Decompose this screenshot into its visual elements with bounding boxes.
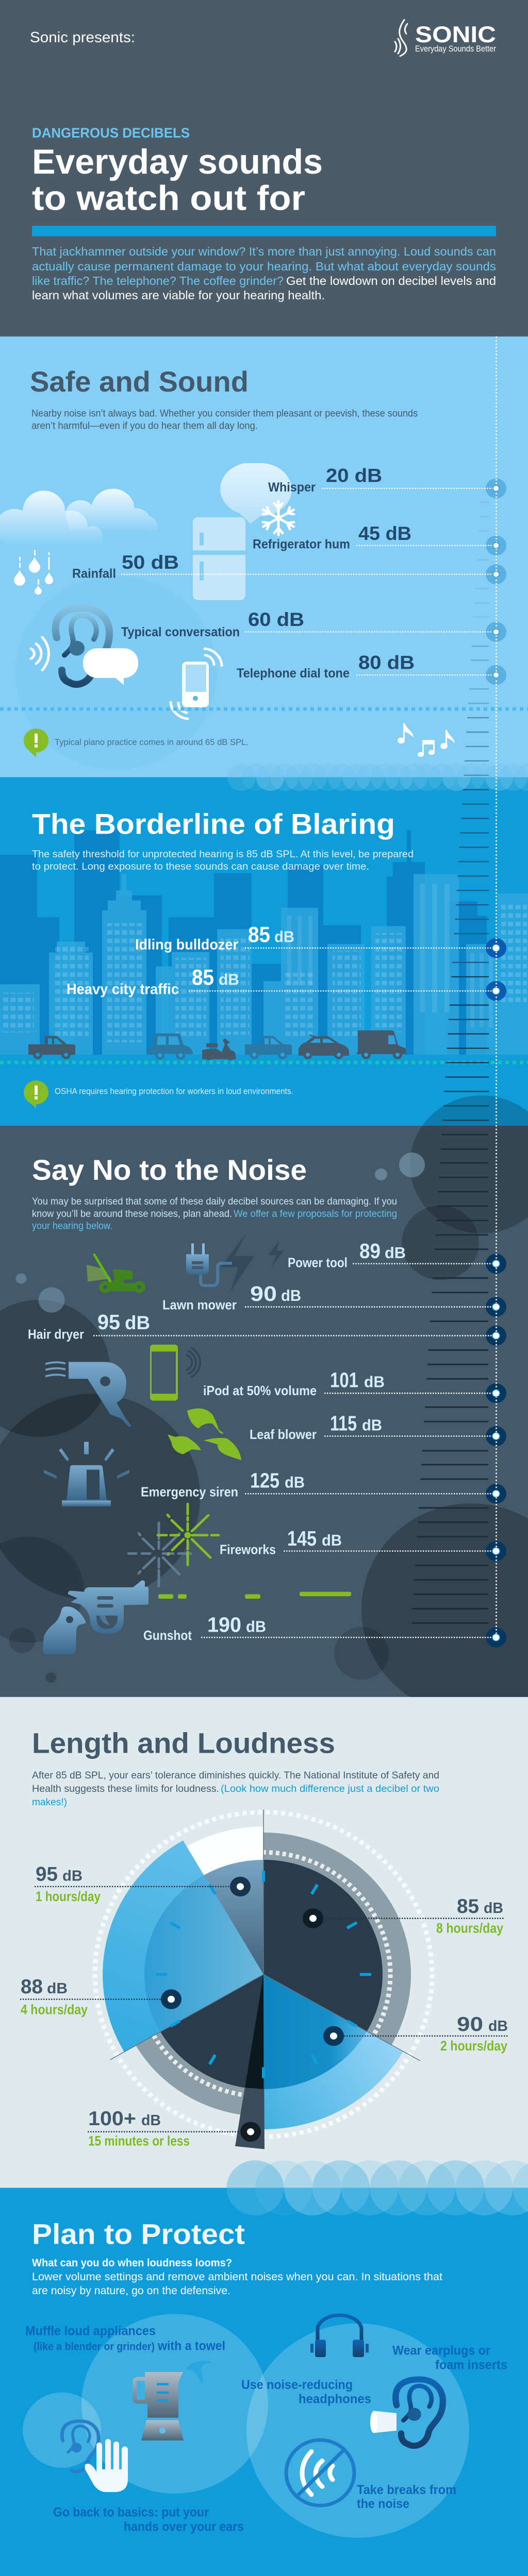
tip: earplugs: Wear earplugs or bbox=[392, 2344, 490, 2358]
text block: aren’t harmful—even if you do hear them all day long. bbox=[31, 420, 258, 431]
label: 95 dB: 95 bbox=[36, 1863, 58, 1885]
panel: say no to the noise bbox=[0, 1095, 528, 1715]
bulldozer label: dB bbox=[274, 928, 294, 945]
text block: know you’ll be around these noises, plan ahead. bbox=[32, 1209, 232, 1219]
label: 100+ dB: dB bbox=[141, 2112, 161, 2129]
icon: clouds bbox=[0, 489, 158, 544]
power tool label bbox=[288, 1240, 406, 1270]
icon: refrigerator bbox=[193, 517, 245, 600]
text block bbox=[32, 1196, 397, 1231]
rainfall label: Rainfall bbox=[72, 567, 116, 581]
lawn mower label: dB bbox=[281, 1287, 301, 1304]
text block: You may be surprised that some of these daily decibel sources can be damaging. If you bbox=[32, 1196, 397, 1207]
rainfall label: 50 dB bbox=[122, 552, 179, 573]
power tool label: dB bbox=[385, 1244, 406, 1262]
iPod label: iPod at 50% volume bbox=[203, 1383, 317, 1398]
bullets bbox=[158, 1592, 351, 1599]
tip: hands over ears: Go back to basics: put your bbox=[53, 2505, 209, 2519]
text: Sonic presents: Sonic presents: bbox=[30, 29, 135, 46]
siren window bbox=[87, 1470, 100, 1499]
tip: muffle appliances: Muffle loud appliances bbox=[25, 2324, 156, 2338]
tip: take breaks: Take breaks from bbox=[357, 2483, 456, 2497]
intro paragraph: like traffic? The telephone? The coffee grinder? bbox=[32, 274, 284, 287]
label: 90 dB: 2 hours/day bbox=[440, 2038, 508, 2054]
label: 100+ dB: 15 minutes or less bbox=[88, 2133, 190, 2149]
icon: ear with sound waves and speech bubble bbox=[31, 608, 138, 685]
icon: sedan bbox=[299, 1035, 349, 1059]
intro paragraph: Get the lowdown on decibel levels and bbox=[286, 274, 496, 287]
intro paragraph: That jackhammer outside your window? It’s more than just annoying. Loud sounds can bbox=[32, 245, 496, 258]
telephone label bbox=[237, 652, 415, 681]
icon: rain drops bbox=[14, 550, 53, 595]
background circles bbox=[0, 1153, 528, 1715]
callout: OSHA: OSHA requires hearing protection for workers in loud environments. bbox=[55, 1087, 293, 1096]
text block: (Look how much difference just a decibel or two bbox=[221, 1783, 439, 1794]
decibel ruler: node centres bbox=[492, 485, 500, 1641]
whisper label bbox=[268, 465, 382, 495]
telephone label: 80 dB bbox=[358, 652, 415, 673]
logo: Sonic: Everyday Sounds Better bbox=[415, 44, 496, 54]
whisper label: Whisper bbox=[268, 480, 316, 495]
tip: earplugs: foam inserts bbox=[435, 2358, 507, 2372]
label: 88 dB bbox=[20, 1976, 182, 2017]
leaf blower label: dB bbox=[362, 1416, 382, 1434]
main title bbox=[32, 142, 323, 217]
telephone label: Telephone dial tone bbox=[237, 666, 350, 681]
emergency siren label: Emergency siren bbox=[141, 1484, 238, 1500]
icon: headphones bbox=[310, 2315, 369, 2357]
label: 85 dB: 8 hours/day bbox=[436, 1920, 504, 1936]
tip: hands over ears bbox=[53, 2505, 244, 2534]
fireworks label: Fireworks bbox=[220, 1542, 276, 1557]
traffic label: Heavy city traffic bbox=[67, 981, 179, 998]
gunshot label: dB bbox=[246, 1618, 266, 1635]
icon: pickup truck bbox=[28, 1036, 75, 1059]
panel: length and loudness bbox=[20, 1727, 508, 2149]
label: 88 dB: dB bbox=[47, 1980, 68, 1997]
text block: We offer a few proposals for protecting bbox=[234, 1209, 397, 1219]
conversation label bbox=[121, 608, 304, 639]
icon: lawn mower bbox=[87, 1255, 145, 1293]
whisper label: 20 dB bbox=[326, 465, 382, 486]
heading: Safe and Sound bbox=[30, 366, 249, 398]
label: 95 dB: dB bbox=[62, 1868, 82, 1884]
tip: noise-reducing headphones bbox=[241, 2378, 371, 2406]
eyebrow: DANGEROUS DECIBELS bbox=[32, 125, 190, 141]
text block: What can you do when loudness looms? bbox=[32, 2256, 232, 2269]
bulldozer label: 85 bbox=[248, 923, 270, 947]
lawn mower label: Lawn mower bbox=[162, 1297, 237, 1312]
emergency siren label bbox=[141, 1469, 305, 1500]
scallops between length and plan sections bbox=[227, 2160, 528, 2215]
text block: are noisy by nature, go on the defensive. bbox=[32, 2284, 230, 2297]
text block: Lower volume settings and remove ambient noises when you can. In situations that bbox=[32, 2270, 442, 2283]
fireworks label: 145 bbox=[287, 1527, 317, 1550]
text block bbox=[32, 1770, 439, 1808]
leaf blower label: Leaf blower bbox=[250, 1427, 317, 1442]
lawn mower label bbox=[162, 1282, 301, 1312]
iPod label: dB bbox=[364, 1373, 385, 1391]
icon: siren bbox=[44, 1442, 129, 1506]
intro paragraph: actually cause permanent damage to your hearing. But what about everyday sounds bbox=[32, 260, 496, 273]
power tool label: 89 bbox=[359, 1240, 381, 1263]
icon: firework green bbox=[158, 1504, 219, 1565]
label: 85 dB: 85 bbox=[457, 1895, 479, 1918]
heading: Say No to the Noise bbox=[32, 1154, 307, 1187]
callout: OSHA bbox=[24, 1080, 293, 1108]
logo: Sonic bbox=[395, 20, 496, 56]
heading: The Borderline of Blaring bbox=[32, 808, 395, 840]
power tool label: Power tool bbox=[288, 1255, 348, 1270]
rainfall label bbox=[72, 552, 179, 581]
label: 95 dB: 1 hours/day bbox=[36, 1888, 101, 1904]
hair dryer label: dB bbox=[125, 1312, 150, 1333]
callout: piano: Typical piano practice comes in around 65 dB SPL. bbox=[55, 737, 249, 747]
background circle behind ear bbox=[15, 576, 217, 769]
scallops between safe and borderline sections bbox=[227, 764, 528, 791]
emergency siren label: 125 bbox=[250, 1469, 279, 1492]
panel: plan to protect bbox=[23, 2218, 507, 2538]
text block: The safety threshold for unprotected hearing is 85 dB SPL. At this level, be prepared bbox=[32, 849, 414, 860]
tip: muffle appliances: (like a blender or grinder) bbox=[34, 2340, 155, 2353]
tip: noise-reducing headphones: Use noise-reducing bbox=[241, 2378, 353, 2392]
hair dryer label bbox=[28, 1311, 150, 1342]
dashed road line bbox=[0, 1061, 528, 1064]
icon: no sound sign bbox=[286, 2440, 354, 2505]
decibel ruler: vertical dotted line bbox=[496, 336, 497, 1637]
blue rule bbox=[32, 226, 496, 236]
decibel ruler: tick marks bbox=[411, 502, 489, 1623]
icon: gun bbox=[43, 1580, 148, 1654]
icon: ear with hand bbox=[62, 2421, 128, 2492]
label: 90 dB: dB bbox=[488, 2018, 508, 2035]
panel: intro header bbox=[30, 20, 496, 302]
text block: Health suggests these limits for loudness. bbox=[32, 1783, 219, 1794]
label: 90 dB bbox=[323, 2013, 508, 2054]
traffic label bbox=[67, 965, 239, 998]
gunshot label bbox=[143, 1613, 266, 1643]
hair dryer label: 95 bbox=[97, 1311, 120, 1334]
icon: car bbox=[146, 1033, 193, 1060]
icon: snowflake bbox=[261, 501, 295, 535]
text block: Nearby noise isn’t always bad. Whether you consider them pleasant or peevish, these sounds bbox=[31, 408, 418, 419]
icon: power plug and lightning bbox=[186, 1233, 284, 1292]
text block: makes!) bbox=[32, 1797, 67, 1808]
intro paragraph bbox=[32, 245, 496, 302]
chart: exposure limits pie bbox=[95, 1810, 432, 2149]
conversation label: 60 dB bbox=[248, 608, 304, 630]
decorative circle spanning sections bbox=[410, 1095, 528, 1233]
text block: to protect. Long exposure to these sounds can cause damage over time. bbox=[32, 861, 369, 872]
icon: hair dryer bbox=[45, 1362, 131, 1427]
tip: muffle appliances: with a towel bbox=[157, 2339, 225, 2353]
icon: ear with earplug bbox=[370, 2379, 443, 2446]
gunshot label: 190 bbox=[207, 1613, 241, 1636]
skyline back layer bbox=[0, 831, 487, 1055]
icon: blender bbox=[133, 2361, 211, 2441]
leaf blower label bbox=[250, 1412, 382, 1442]
decibel ruler: node discs bbox=[486, 479, 506, 1647]
intro paragraph: learn what volumes are viable for your hearing health. bbox=[32, 289, 325, 302]
text block: your hearing below. bbox=[32, 1221, 112, 1231]
main title: Everyday sounds bbox=[32, 142, 323, 181]
tip: take breaks bbox=[357, 2483, 456, 2511]
label: 85 dB: dB bbox=[484, 1900, 503, 1917]
refrigerator label bbox=[253, 523, 411, 551]
icon: music notes bbox=[398, 723, 455, 757]
building windows bbox=[3, 901, 527, 1042]
traffic label: 85 bbox=[192, 965, 214, 990]
bulldozer label bbox=[135, 923, 294, 953]
iPod label: 101 bbox=[330, 1368, 358, 1392]
leaf blower label: 115 bbox=[330, 1412, 357, 1435]
tip: take breaks: the noise bbox=[357, 2497, 409, 2511]
dashed ground line bbox=[0, 707, 528, 711]
tip: hands over ears: hands over your ears bbox=[124, 2520, 244, 2534]
traffic label: dB bbox=[219, 971, 239, 988]
text block bbox=[31, 408, 418, 431]
label: 90 dB: 90 bbox=[457, 2013, 483, 2036]
icon: telephone bbox=[171, 649, 222, 719]
label: 88 dB: 88 bbox=[21, 1976, 43, 1998]
iPod label bbox=[203, 1368, 385, 1398]
icon: scooter bbox=[202, 1038, 236, 1059]
refrigerator label: Refrigerator hum bbox=[253, 537, 350, 551]
heading: Length and Loudness bbox=[32, 1727, 335, 1759]
icon: whisper bubble bbox=[220, 463, 292, 523]
panel: safe and sound bbox=[0, 366, 528, 769]
icon: phone bbox=[150, 1345, 200, 1401]
label: 100+ dB: 100+ bbox=[88, 2108, 136, 2130]
text block bbox=[32, 2256, 442, 2297]
decibel ruler: horizontal leader lines bbox=[93, 488, 494, 1637]
callout: piano bbox=[24, 728, 249, 757]
emergency siren label: dB bbox=[285, 1473, 305, 1491]
label: 88 dB: 4 hours/day bbox=[21, 2002, 88, 2017]
background circles bbox=[23, 2314, 469, 2538]
panel: borderline of blaring bbox=[0, 808, 528, 1108]
icon: pickup truck translucent bbox=[245, 1036, 292, 1059]
label: 85 dB bbox=[303, 1895, 504, 1936]
hair dryer label: Hair dryer bbox=[28, 1327, 84, 1342]
label: 100+ dB bbox=[88, 2108, 261, 2149]
lawn mower label: 90 bbox=[250, 1282, 277, 1306]
text block bbox=[32, 849, 414, 872]
icon: delivery van bbox=[357, 1030, 406, 1059]
tip: earplugs bbox=[392, 2344, 507, 2372]
fireworks label bbox=[220, 1527, 342, 1557]
icon: leaves bbox=[168, 1409, 241, 1460]
skyline front layer bbox=[0, 874, 528, 1055]
main title: to watch out for bbox=[32, 179, 305, 217]
conversation label: Typical conversation bbox=[121, 625, 240, 639]
heading: Plan to Protect bbox=[32, 2218, 245, 2250]
fireworks label: dB bbox=[322, 1532, 342, 1549]
label: 95 dB bbox=[35, 1863, 251, 1904]
text block: After 85 dB SPL, your ears’ tolerance diminishes quickly. The National Institute of Safety and bbox=[32, 1770, 439, 1781]
tip: noise-reducing headphones: headphones bbox=[299, 2392, 371, 2406]
refrigerator label: 45 dB bbox=[358, 523, 411, 544]
tip: muffle appliances bbox=[25, 2324, 225, 2353]
bulldozer label: Idling bulldozer bbox=[135, 936, 238, 953]
logo: Sonic: SONIC bbox=[415, 22, 496, 47]
icon: firework faded bbox=[128, 1523, 191, 1586]
gunshot label: Gunshot bbox=[143, 1628, 192, 1643]
building columns bbox=[287, 884, 493, 1027]
